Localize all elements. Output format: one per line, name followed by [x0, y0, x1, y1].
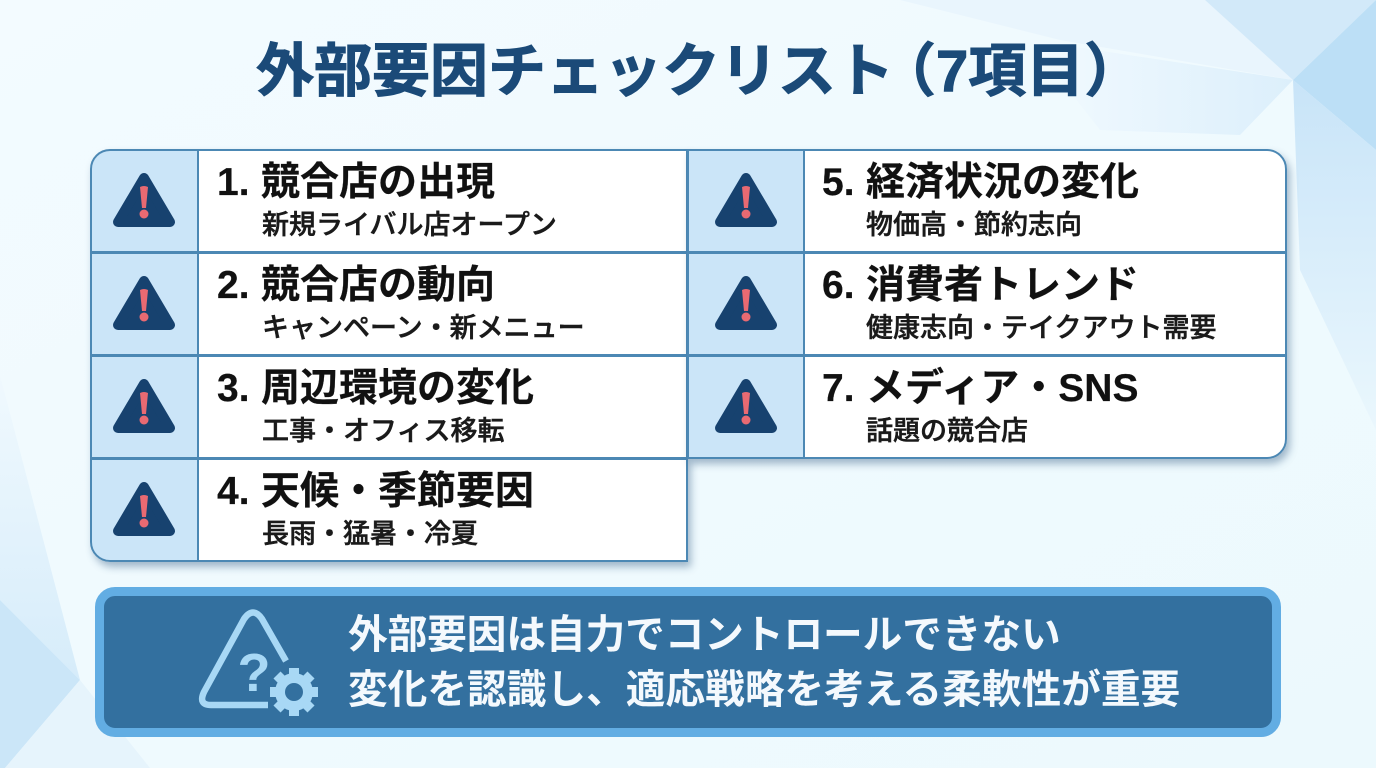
item 5: 物価高・節約志向 — [866, 210, 1082, 240]
item 5: 5. — [822, 161, 855, 204]
item 7: メディア・SNS — [866, 367, 1138, 410]
item 7: 7. — [822, 367, 855, 410]
item 2: キャンペーン・新メニュー — [262, 313, 585, 343]
item 6: 6. — [822, 264, 855, 307]
callout text: 変化を認識し、適応戦略を考える柔軟性が重要 — [348, 668, 1180, 712]
icon: warning triangle with question mark and gear: ? — [238, 643, 270, 703]
panel: right checklist — [687, 149, 1287, 459]
icon: warning — [687, 355, 805, 459]
icon: warning — [687, 252, 805, 356]
item 3: 3. — [217, 367, 250, 410]
title: 外部要因チェックリスト（7項目） — [256, 39, 1142, 104]
item 2: 2. — [217, 264, 250, 307]
item 1: 競合店の出現 — [261, 161, 495, 204]
item 6: 健康志向・テイクアウト需要 — [866, 313, 1216, 343]
item 3: 工事・オフィス移転 — [262, 416, 504, 446]
icon: warning — [90, 355, 199, 459]
icon: warning — [687, 149, 805, 253]
item 4: 長雨・猛暑・冷夏 — [262, 519, 478, 549]
item 7: 話題の競合店 — [866, 416, 1028, 446]
item 2: 競合店の動向 — [261, 264, 495, 307]
item 4: 4. — [217, 470, 250, 513]
icon: warning — [90, 252, 199, 356]
icon: warning — [90, 458, 199, 562]
item 6 — [687, 253, 1287, 355]
icon: warning triangle with question mark and gear — [198, 609, 318, 716]
item 1: 新規ライバル店オープン — [262, 210, 557, 240]
item 3: 周辺環境の変化 — [261, 367, 534, 410]
item 5: 経済状況の変化 — [866, 161, 1139, 204]
callout text — [348, 613, 1180, 712]
callout banner — [95, 587, 1281, 737]
item 4: 天候・季節要因 — [261, 470, 534, 513]
item 1: 1. — [217, 161, 250, 204]
icon: warning — [90, 149, 199, 253]
panel: left checklist — [90, 149, 688, 562]
item 2 — [90, 253, 687, 355]
item 3 — [90, 356, 687, 458]
item 1 — [90, 149, 687, 252]
item 4 — [90, 459, 688, 562]
item 7 — [687, 356, 1287, 459]
item 6: 消費者トレンド — [866, 264, 1139, 307]
callout text: 外部要因は自力でコントロールできない — [348, 613, 1061, 657]
item 5 — [687, 149, 1287, 252]
